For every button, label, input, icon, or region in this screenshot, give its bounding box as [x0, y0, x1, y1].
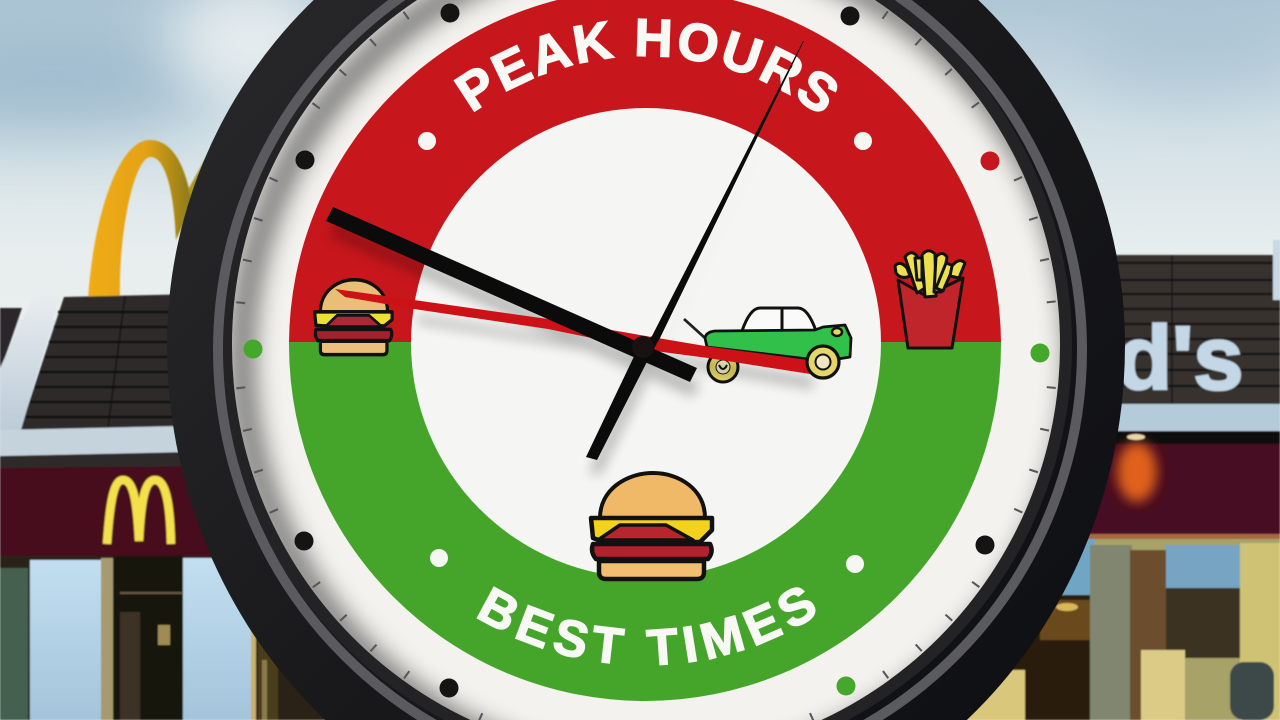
rear wheel	[708, 352, 738, 382]
background: sky	[0, 0, 1280, 320]
car cabin	[742, 308, 816, 331]
sign letters: d's	[1117, 309, 1243, 409]
dark band	[0, 452, 186, 468]
icon: car	[684, 308, 851, 382]
right window	[950, 539, 1280, 720]
black hour hand	[326, 207, 697, 382]
left fascia	[0, 426, 180, 456]
dark band	[1060, 431, 1280, 444]
minute ticks	[238, 0, 1054, 720]
right fascia	[1090, 404, 1280, 431]
yellow M logo	[107, 480, 171, 544]
front wheel	[807, 346, 839, 378]
car antenna	[684, 319, 705, 338]
hour dots	[244, 4, 1050, 698]
black minute hand	[586, 41, 804, 460]
clock face	[232, 0, 1060, 720]
background: left restaurant	[0, 140, 360, 720]
left roof	[0, 294, 200, 430]
maroon sign band with lamp glow	[1060, 434, 1280, 534]
left lower storefront	[0, 556, 360, 720]
icon: fries	[895, 251, 965, 348]
clock outer rim	[167, 0, 1125, 720]
clock inner dark band	[220, 0, 1072, 720]
red second hand	[335, 289, 810, 374]
tan trim	[1060, 534, 1280, 539]
white roof divider	[0, 295, 60, 430]
fries box	[898, 278, 963, 348]
red ring segment: peak hours	[289, 0, 1001, 342]
maroon sign band	[0, 466, 220, 559]
heading: best times: BEST TIMES	[476, 586, 816, 666]
clock hub	[632, 336, 654, 358]
clock inner grey ring	[218, 0, 1082, 720]
ring white dots	[418, 132, 872, 573]
icon: big burger	[591, 473, 712, 579]
golden arches	[88, 140, 215, 300]
centre disc	[411, 108, 881, 578]
car body	[705, 325, 851, 359]
icon: small burger	[315, 280, 392, 355]
heading: peak hours: PEAK HOURS	[454, 18, 838, 112]
background: right restaurant	[950, 240, 1280, 720]
hand shadows	[329, 56, 813, 475]
green ring segment: best times	[289, 342, 1001, 701]
face rim shadow	[242, 0, 1078, 720]
car headlight	[832, 328, 842, 336]
right roof	[1090, 240, 1280, 405]
clock	[167, 0, 1125, 720]
fries sticks	[895, 251, 965, 297]
